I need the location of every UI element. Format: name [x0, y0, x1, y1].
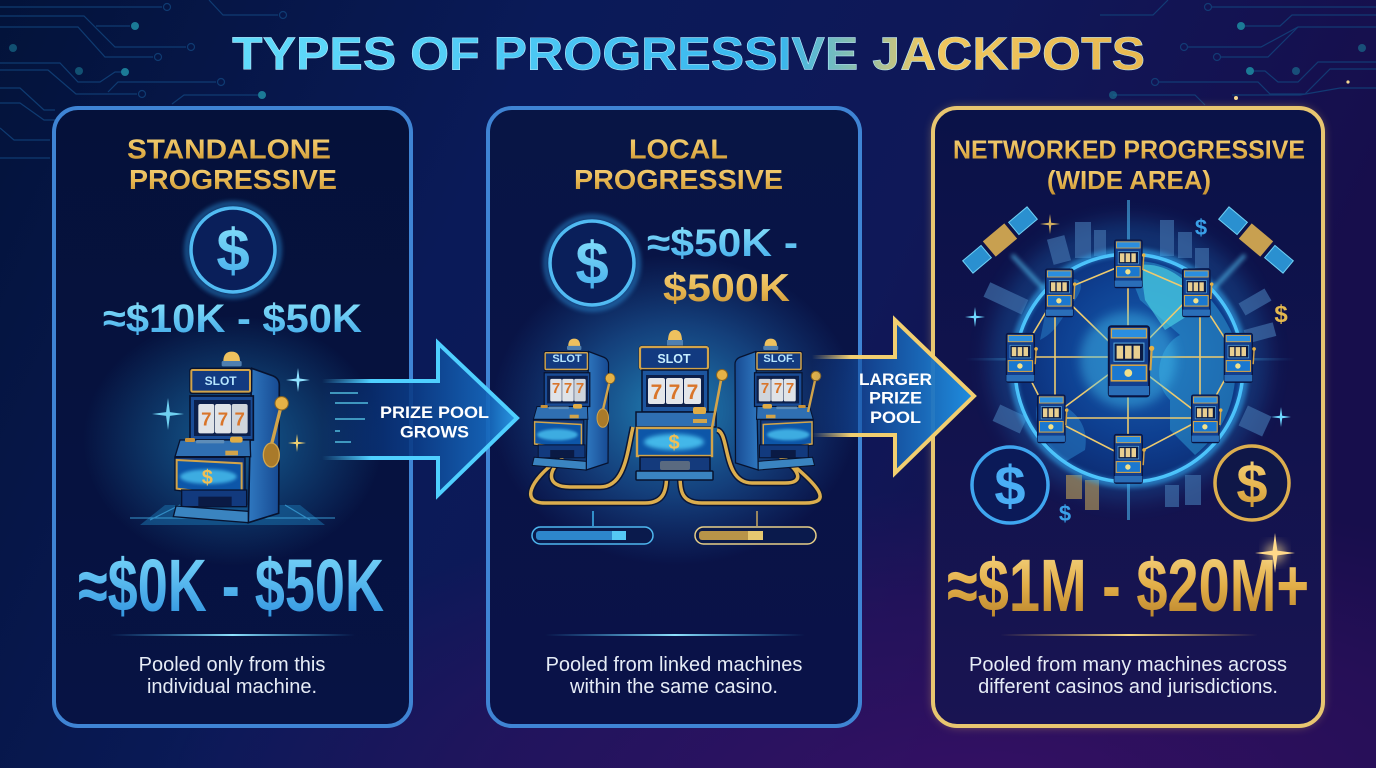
- slot label right: 7: [761, 380, 769, 397]
- icon: dollar coin: [187, 204, 279, 296]
- arrow: prize pool grows: [322, 343, 517, 495]
- icon: slot machine: $: [202, 467, 213, 489]
- slot label left: 7: [552, 380, 560, 397]
- city skylines: [983, 220, 1276, 510]
- slot label center: 7: [651, 381, 662, 404]
- icon: gold dollar coin: [1215, 446, 1289, 520]
- circuit nodes: [9, 22, 1366, 100]
- title: TYPES OF PROGRESSIVE JACKPOTS: [232, 28, 1145, 80]
- globe: [1015, 254, 1243, 482]
- big prize amount: ≈$0K - $50K: [78, 544, 384, 627]
- panel frame: [488, 108, 860, 726]
- glow behind machines: [491, 255, 859, 565]
- slot label right: SLOF.: [763, 353, 795, 365]
- slot label center: 7: [687, 381, 698, 404]
- arrow: larger prize pool: LARGER: [859, 370, 932, 389]
- slot label center: 7: [669, 381, 680, 404]
- icon: slot machine: 7: [218, 408, 228, 429]
- network machines: [1006, 240, 1256, 483]
- description: Pooled from many machines across: [969, 654, 1287, 676]
- meter: gold progress: [695, 511, 816, 544]
- description: Pooled only from this: [139, 654, 325, 676]
- panel frame: [933, 108, 1323, 726]
- slot label center: SLOT: [657, 352, 691, 366]
- heading: STANDALONE: [127, 134, 331, 164]
- icon: blue dollar coin: [972, 447, 1048, 523]
- description: within the same casino.: [569, 676, 778, 698]
- circuit pattern right: [1100, 0, 1376, 105]
- panel: standalone progressive: [54, 108, 411, 726]
- icon: slot machine left: [532, 339, 615, 470]
- icon: slot machine: [83, 315, 383, 565]
- meter: blue progress: [532, 511, 653, 544]
- arrow: larger prize pool: PRIZE: [869, 388, 922, 408]
- slot label center: $: [668, 432, 680, 454]
- heading: PROGRESSIVE: [129, 164, 337, 195]
- heading: [127, 134, 337, 195]
- arrow: prize pool grows: PRIZE POOL: [380, 403, 489, 422]
- icon: satellite left: [961, 205, 1039, 275]
- heading: PROGRESSIVE: [574, 164, 783, 195]
- slot label left: SLOT: [552, 353, 582, 365]
- arrow: larger prize pool: [812, 320, 974, 473]
- icon: slot machine: SLOT: [205, 374, 237, 388]
- light beams: [965, 358, 1295, 360]
- icon: slot machine: 7: [234, 408, 245, 429]
- network links: [1019, 263, 1237, 458]
- jackpot range: ≈$50K -: [647, 222, 798, 265]
- description: Pooled from linked machines: [546, 654, 802, 676]
- icon: dollar coin: [546, 217, 638, 309]
- slot label right: 7: [774, 380, 782, 397]
- jackpot range: [647, 222, 798, 310]
- panel: local progressive: [488, 108, 860, 726]
- panel frame: [54, 108, 411, 726]
- heading: [953, 134, 1305, 195]
- icon: slot machine center: [636, 330, 728, 480]
- slot label left: [552, 353, 584, 397]
- icon: satellite right: [1217, 205, 1295, 275]
- small dollars: [1059, 215, 1288, 526]
- slot label right: [761, 353, 795, 397]
- heading: NETWORKED PROGRESSIVE: [953, 134, 1305, 164]
- arrow: larger prize pool: POOL: [870, 408, 921, 427]
- jackpot range: $500K: [663, 267, 790, 310]
- description: individual machine.: [147, 676, 317, 698]
- slot label left: 7: [564, 380, 572, 397]
- heading: (WIDE AREA): [1047, 165, 1211, 195]
- icon: slot machine right: [735, 339, 821, 470]
- icon: sparkle flare: [1255, 533, 1295, 573]
- description: different casinos and jurisdictions.: [978, 676, 1278, 698]
- description: [546, 654, 802, 698]
- icon: blue dollar coin: $: [994, 454, 1026, 517]
- icon: gold dollar coin: $: [1236, 452, 1268, 515]
- icon: slot machine: 7: [201, 408, 212, 429]
- globe network: [961, 200, 1295, 526]
- slot label right: 7: [786, 380, 794, 397]
- arrow: prize pool grows: GROWS: [400, 422, 469, 442]
- jackpot range: ≈$10K - $50K: [103, 297, 362, 341]
- small dollars: $: [1059, 501, 1071, 526]
- small dollars: $: [1274, 301, 1288, 328]
- icon: dollar coin: $: [575, 230, 609, 297]
- heading: LOCAL: [629, 134, 728, 164]
- slot label center: [651, 352, 698, 454]
- icon: dollar coin: $: [216, 217, 250, 284]
- slot label left: 7: [576, 380, 584, 397]
- description: [969, 654, 1287, 698]
- description: [139, 654, 325, 698]
- heading: [574, 134, 783, 195]
- wires: [531, 427, 820, 503]
- circuit pattern left: [0, 0, 286, 158]
- panel: networked progressive: [933, 108, 1323, 726]
- small dollars: $: [1195, 215, 1207, 240]
